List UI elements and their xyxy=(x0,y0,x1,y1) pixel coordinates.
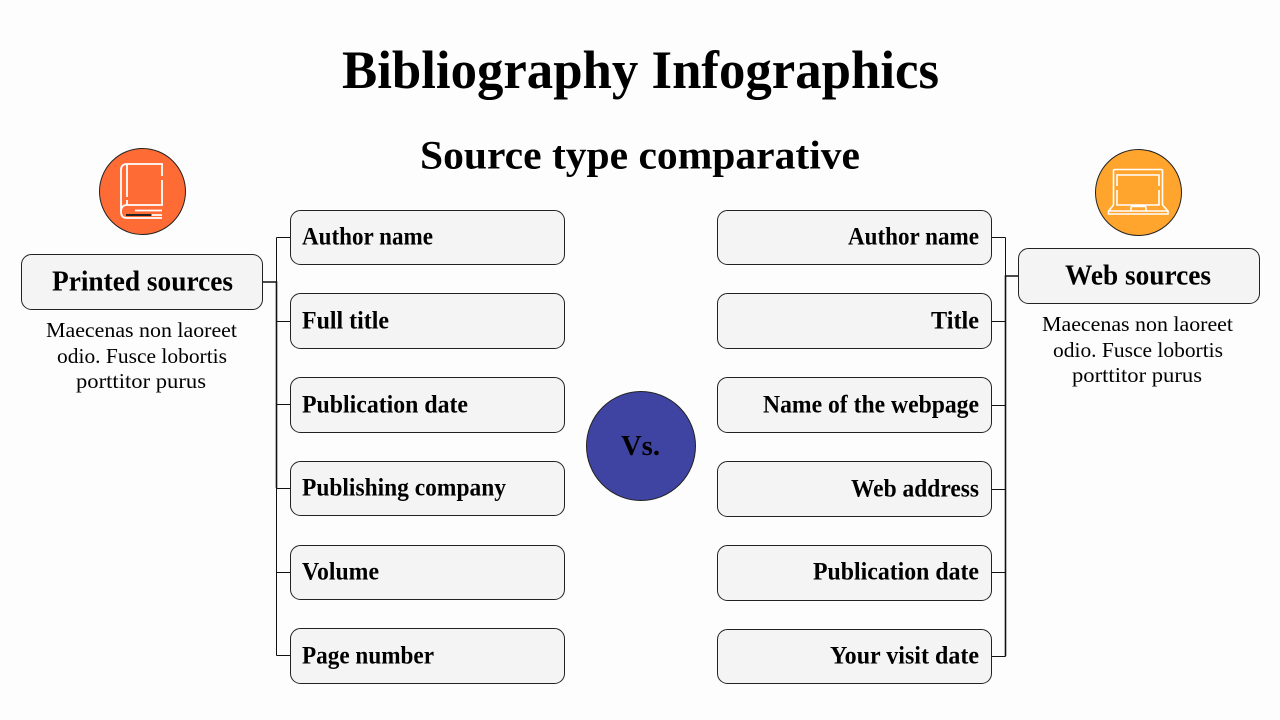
subtitle: Source type comparative xyxy=(420,132,860,178)
text: printed sources description: porttitor purus xyxy=(76,369,206,393)
field: publishing company: Publishing company xyxy=(302,474,506,502)
heading: web sources: Web sources xyxy=(1065,260,1211,292)
panel: printed source fields xyxy=(290,210,564,684)
field: author name: Author name xyxy=(848,224,979,250)
text: web sources description: porttitor purus xyxy=(1072,363,1202,387)
field: author name xyxy=(718,210,992,264)
text: web sources description: Maecenas non laoreet xyxy=(1042,312,1233,336)
field: page number: Page number xyxy=(302,642,434,670)
text: printed sources description: odio. Fusce lobortis xyxy=(57,344,227,368)
field: web address: Web address xyxy=(851,476,979,502)
field: page number xyxy=(290,628,564,684)
field: name of the webpage: Name of the webpage xyxy=(763,392,979,418)
badge: versus: Vs. xyxy=(621,431,660,462)
field: title xyxy=(718,294,992,348)
heading: web sources xyxy=(1018,248,1260,304)
icon: laptop in amber circle xyxy=(1096,150,1182,236)
text: printed sources description xyxy=(46,318,237,393)
field: title: Title xyxy=(931,308,979,334)
field: name of the webpage xyxy=(718,378,992,432)
field: full title: Full title xyxy=(302,308,389,334)
field: publishing company xyxy=(290,462,564,516)
text: web sources description xyxy=(1042,312,1233,387)
text: printed sources description: Maecenas non laoreet xyxy=(46,318,237,342)
heading: printed sources: Printed sources xyxy=(52,266,233,298)
panel: printed sources xyxy=(22,148,262,393)
field: publication date: Publication date xyxy=(302,392,468,418)
heading: printed sources xyxy=(22,254,262,310)
field: volume xyxy=(290,546,564,600)
field: your visit date: Your visit date xyxy=(830,642,979,670)
connector: printed sources tree xyxy=(262,238,290,656)
badge: versus xyxy=(586,392,696,500)
field: your visit date xyxy=(718,630,992,684)
field: web address xyxy=(718,462,992,516)
field: full title xyxy=(290,294,564,348)
field: author name xyxy=(290,210,564,264)
field: publication date: Publication date xyxy=(813,558,979,586)
field: publication date xyxy=(718,546,992,600)
field: author name: Author name xyxy=(302,224,433,250)
connector: web sources tree xyxy=(992,238,1018,656)
field: publication date xyxy=(290,378,564,432)
title: Bibliography Infographics xyxy=(342,40,939,100)
icon: book in orange circle xyxy=(100,148,186,234)
panel: web sources xyxy=(1018,150,1260,387)
text: web sources description: odio. Fusce lobortis xyxy=(1053,338,1223,362)
panel: web source fields xyxy=(718,210,992,684)
field: volume: Volume xyxy=(302,558,379,586)
